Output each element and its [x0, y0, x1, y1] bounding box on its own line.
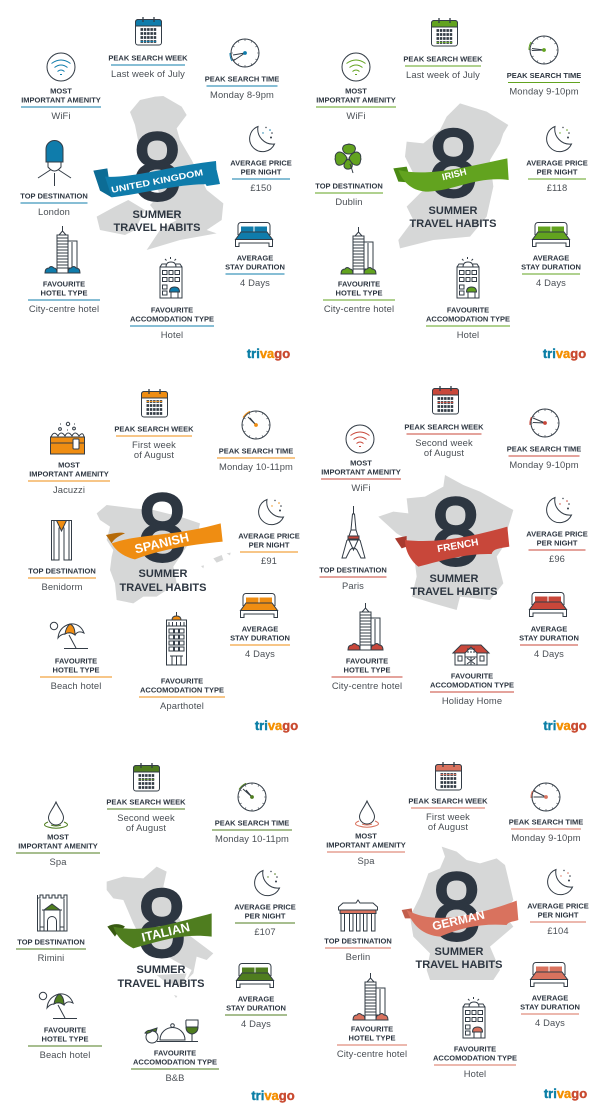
average stay duration: 4 Days	[536, 277, 566, 288]
peak search week: First week	[132, 439, 176, 450]
icon: wifi	[346, 425, 374, 453]
peak search week: Last week of July	[111, 68, 185, 79]
map: United Kingdom	[97, 96, 223, 250]
favourite accomodation type	[430, 672, 514, 706]
favourite hotel type: FAVOURITE	[351, 1025, 393, 1034]
logo: trivago: trivago	[544, 1086, 587, 1101]
most important amenity	[16, 833, 100, 867]
favourite accomodation type: FAVOURITE	[151, 306, 193, 315]
numeral eight: 8	[133, 113, 182, 220]
map, eight and ribbon: United Kingdom	[93, 96, 223, 250]
panel: Irish	[315, 18, 588, 361]
ribbon	[106, 523, 223, 559]
map, eight and ribbon: German	[402, 847, 518, 980]
average price per night: AVERAGE PRICE	[526, 159, 588, 168]
heading	[120, 568, 206, 594]
top destination: Dublin	[335, 196, 363, 207]
most important amenity	[326, 832, 406, 866]
peak search week	[114, 425, 194, 460]
favourite hotel type: City-centre hotel	[332, 680, 402, 691]
peak search time	[212, 819, 292, 844]
favourite accomodation type: Aparthotel	[160, 700, 204, 711]
heading: TRAVEL HABITS	[410, 586, 498, 598]
peak search week	[403, 55, 483, 80]
peak search week	[106, 798, 186, 833]
average stay duration: AVERAGE	[237, 254, 273, 263]
panel: Italian	[16, 763, 296, 1103]
numeral eight: 8	[431, 478, 480, 585]
most important amenity: IMPORTANT AMENITY	[21, 96, 101, 105]
icon: breakfast cloche	[145, 1020, 198, 1043]
favourite hotel type: HOTEL TYPE	[53, 666, 99, 675]
icon: wifi	[342, 53, 370, 81]
peak search time: Monday 9-10pm	[511, 832, 581, 843]
favourite hotel type: Beach hotel	[40, 1049, 90, 1060]
peak search week: PEAK SEARCH WEEK	[106, 798, 186, 807]
average price per night: PER NIGHT	[245, 912, 286, 921]
icon: calendar	[136, 17, 162, 45]
heading: SUMMER	[435, 946, 483, 958]
average price per night: AVERAGE PRICE	[526, 530, 588, 539]
map, eight and ribbon: Spanish	[97, 474, 231, 603]
icon: moon	[250, 126, 274, 152]
average price per night: £118	[547, 182, 567, 193]
average stay duration: 4 Days	[240, 277, 270, 288]
average stay duration	[520, 994, 580, 1028]
heading	[416, 946, 502, 971]
average price per night: PER NIGHT	[537, 168, 578, 177]
average stay duration	[521, 254, 581, 288]
icon: moon	[547, 126, 572, 152]
ribbon title: GERMAN	[431, 908, 486, 933]
panel: United Kingdom	[20, 17, 292, 361]
average stay duration: AVERAGE	[533, 254, 569, 263]
peak search week: Last week of July	[406, 69, 480, 80]
average stay duration: STAY DURATION	[521, 263, 581, 272]
favourite accomodation type: Holiday Home	[442, 695, 502, 706]
average price per night: AVERAGE PRICE	[234, 903, 296, 912]
icon: spa drop	[356, 801, 378, 827]
favourite hotel type: FAVOURITE	[338, 280, 380, 289]
most important amenity: MOST	[58, 461, 80, 470]
most important amenity: WiFi	[51, 110, 71, 121]
icon: hotel	[463, 997, 485, 1038]
peak search time: Monday 9-10pm	[509, 459, 579, 470]
icon: spa drop	[44, 802, 68, 828]
peak search week: PEAK SEARCH WEEK	[108, 54, 188, 63]
peak search week: PEAK SEARCH WEEK	[404, 423, 484, 432]
favourite accomodation type	[426, 306, 510, 340]
favourite accomodation type: FAVOURITE	[451, 672, 493, 681]
top destination: TOP DESTINATION	[324, 937, 392, 946]
top destination: TOP DESTINATION	[319, 566, 387, 575]
peak search week: Second week	[117, 812, 175, 823]
icon: bed	[240, 594, 278, 618]
heading: SUMMER	[429, 205, 477, 217]
peak search week: of August	[134, 449, 174, 460]
ribbon title: IRISH	[441, 166, 468, 182]
favourite accomodation type: FAVOURITE	[447, 306, 489, 315]
average stay duration: 4 Days	[241, 1018, 271, 1029]
average price per night	[234, 903, 296, 937]
favourite hotel type: City-centre hotel	[337, 1048, 407, 1059]
heading	[114, 209, 200, 234]
peak search week: PEAK SEARCH WEEK	[403, 55, 483, 64]
average stay duration: STAY DURATION	[520, 1003, 580, 1012]
ribbon title: ITALIAN	[140, 920, 191, 945]
top destination	[319, 566, 387, 591]
most important amenity: MOST	[355, 832, 377, 841]
peak search time: Monday 8-9pm	[210, 89, 274, 100]
icon: clock	[242, 411, 270, 439]
favourite hotel type: HOTEL TYPE	[42, 1035, 88, 1044]
top destination	[324, 937, 392, 962]
icon: Rimini gate	[38, 895, 67, 931]
favourite accomodation type: ACCOMODATION TYPE	[130, 315, 214, 324]
most important amenity	[316, 87, 396, 121]
most important amenity: IMPORTANT AMENITY	[326, 841, 406, 850]
top destination: TOP DESTINATION	[20, 192, 88, 201]
average price per night: AVERAGE PRICE	[230, 159, 292, 168]
top destination	[28, 567, 96, 592]
top destination: Paris	[342, 580, 364, 591]
icon: clock	[529, 36, 558, 64]
average price per night	[526, 159, 588, 193]
ribbon title: UNITED KINGDOM	[110, 167, 204, 195]
favourite accomodation type: B&B	[165, 1072, 185, 1083]
heading: TRAVEL HABITS	[118, 978, 204, 990]
peak search week	[408, 797, 488, 832]
favourite hotel type: FAVOURITE	[44, 1026, 86, 1035]
most important amenity: IMPORTANT AMENITY	[29, 470, 109, 479]
numeral eight: 8	[137, 870, 186, 977]
average stay duration: 4 Days	[245, 648, 275, 659]
panel: German	[324, 762, 589, 1101]
peak search week: Second week	[415, 437, 473, 448]
average stay duration: AVERAGE	[238, 995, 274, 1004]
ribbon	[107, 913, 212, 948]
top destination: TOP DESTINATION	[315, 182, 383, 191]
icon: city tower	[348, 603, 383, 650]
icon: shamrock	[335, 144, 361, 173]
top destination: London	[38, 206, 70, 217]
average stay duration: STAY DURATION	[519, 634, 579, 643]
favourite accomodation type: ACCOMODATION TYPE	[140, 686, 224, 695]
heading: TRAVEL HABITS	[410, 218, 496, 230]
heading: TRAVEL HABITS	[114, 222, 200, 234]
most important amenity	[28, 461, 110, 495]
peak search time	[217, 447, 295, 472]
favourite hotel type: HOTEL TYPE	[336, 289, 382, 298]
average price per night: PER NIGHT	[538, 911, 579, 920]
most important amenity: WiFi	[351, 482, 371, 493]
icon: city tower	[353, 973, 388, 1020]
most important amenity: MOST	[350, 459, 372, 468]
top destination: Rimini	[38, 952, 64, 963]
most important amenity: Spa	[357, 855, 375, 866]
favourite hotel type: HOTEL TYPE	[41, 289, 87, 298]
average price per night: PER NIGHT	[249, 541, 290, 550]
favourite hotel type: HOTEL TYPE	[349, 1034, 395, 1043]
icon: trousers	[52, 520, 72, 560]
icon: hotel	[457, 257, 479, 298]
logo: trivago: trivago	[255, 718, 298, 733]
favourite hotel type: FAVOURITE	[43, 280, 85, 289]
average stay duration	[230, 625, 290, 659]
peak search time: PEAK SEARCH TIME	[507, 445, 581, 454]
average stay duration	[519, 625, 579, 659]
average stay duration: AVERAGE	[531, 625, 567, 634]
icon: hotel	[160, 257, 182, 298]
icon: aparthotel	[166, 612, 186, 665]
favourite hotel type: City-centre hotel	[324, 303, 394, 314]
favourite hotel type: HOTEL TYPE	[344, 666, 390, 675]
top destination	[315, 182, 383, 207]
favourite accomodation type: FAVOURITE	[454, 1045, 496, 1054]
peak search week	[404, 423, 484, 458]
map: Italy	[107, 867, 213, 998]
peak search time	[507, 71, 581, 96]
numeral eight: 8	[138, 474, 187, 581]
icon: bed	[530, 592, 566, 616]
panel: French	[319, 386, 588, 733]
logo: trivago: trivago	[543, 346, 586, 361]
average price per night: £150	[250, 182, 272, 193]
icon: calendar	[142, 389, 168, 417]
peak search time: PEAK SEARCH TIME	[507, 71, 581, 80]
numeral eight: 8	[432, 853, 481, 960]
peak search time: PEAK SEARCH TIME	[215, 819, 289, 828]
map: Spain	[97, 505, 231, 603]
map, eight and ribbon: Italian	[107, 867, 213, 998]
favourite hotel type	[40, 657, 112, 691]
average price per night: AVERAGE PRICE	[238, 532, 300, 541]
favourite accomodation type: ACCOMODATION TYPE	[133, 1058, 217, 1067]
icon: wifi	[47, 53, 75, 81]
map: France	[378, 475, 513, 610]
icon: moon	[259, 500, 284, 525]
average price per night: £104	[547, 925, 569, 936]
top destination: TOP DESTINATION	[17, 938, 85, 947]
favourite hotel type	[323, 280, 395, 314]
average stay duration: 4 Days	[534, 648, 564, 659]
average price per night	[238, 532, 300, 566]
most important amenity: MOST	[47, 833, 69, 842]
ribbon	[93, 161, 220, 197]
heading	[410, 205, 496, 230]
icon: clock	[230, 39, 259, 67]
most important amenity: Spa	[49, 856, 67, 867]
icon: bed	[236, 964, 274, 988]
favourite hotel type	[337, 1025, 407, 1059]
icon: calendar	[436, 762, 462, 790]
icon: Eiffel tower	[342, 506, 365, 558]
favourite accomodation type	[130, 306, 214, 340]
top destination: Benidorm	[41, 581, 83, 592]
average price per night	[526, 530, 588, 564]
most important amenity: IMPORTANT AMENITY	[321, 468, 401, 477]
icon: bed	[530, 962, 568, 986]
icon: beach umbrella	[50, 622, 88, 648]
peak search week: PEAK SEARCH WEEK	[408, 797, 488, 806]
icon: city tower	[341, 227, 376, 274]
average price per night	[230, 159, 292, 193]
icon: moon	[547, 498, 572, 523]
icon: moon	[548, 870, 572, 895]
peak search week: of August	[126, 822, 166, 833]
icon: moon	[255, 870, 280, 896]
logo: trivago: trivago	[247, 346, 290, 361]
ribbon	[402, 901, 518, 937]
most important amenity: IMPORTANT AMENITY	[18, 842, 98, 851]
heading	[118, 964, 204, 990]
favourite accomodation type	[131, 1049, 219, 1083]
most important amenity: IMPORTANT AMENITY	[316, 96, 396, 105]
average price per night	[527, 902, 589, 936]
icon: royal guard	[38, 140, 71, 186]
heading	[410, 573, 498, 598]
favourite hotel type: City-centre hotel	[29, 303, 99, 314]
icon: clock	[530, 409, 559, 437]
favourite hotel type: FAVOURITE	[346, 657, 388, 666]
most important amenity: MOST	[50, 87, 72, 96]
average price per night: £91	[261, 555, 277, 566]
most important amenity: Jacuzzi	[53, 484, 85, 495]
average price per night: PER NIGHT	[537, 539, 578, 548]
icon: jacuzzi	[50, 422, 84, 454]
icon: holiday home	[453, 645, 489, 665]
favourite accomodation type: Hotel	[457, 329, 479, 340]
peak search time	[205, 75, 279, 100]
favourite accomodation type: FAVOURITE	[161, 677, 203, 686]
favourite hotel type: Beach hotel	[51, 680, 101, 691]
average price per night: £96	[549, 553, 565, 564]
top destination: Berlin	[346, 951, 370, 962]
favourite hotel type: FAVOURITE	[55, 657, 97, 666]
icon: clock	[238, 783, 266, 811]
peak search time	[509, 818, 583, 843]
top destination	[16, 938, 86, 963]
average stay duration: 4 Days	[535, 1017, 565, 1028]
peak search time: PEAK SEARCH TIME	[509, 818, 583, 827]
peak search time	[507, 445, 581, 470]
average stay duration: AVERAGE	[242, 625, 278, 634]
favourite accomodation type	[139, 677, 225, 711]
most important amenity: MOST	[345, 87, 367, 96]
average price per night: PER NIGHT	[241, 168, 282, 177]
favourite accomodation type: ACCOMODATION TYPE	[433, 1054, 517, 1063]
favourite hotel type	[28, 1026, 102, 1060]
average stay duration: STAY DURATION	[226, 1004, 286, 1013]
ribbon title: FRENCH	[436, 537, 479, 555]
average stay duration: AVERAGE	[532, 994, 568, 1003]
most important amenity	[321, 459, 401, 493]
average price per night: AVERAGE PRICE	[527, 902, 589, 911]
peak search time: Monday 9-10pm	[509, 86, 579, 96]
peak search time: Monday 10-11pm	[219, 461, 293, 472]
numeral eight: 8	[429, 110, 478, 217]
favourite accomodation type: ACCOMODATION TYPE	[426, 315, 510, 324]
ribbon	[393, 158, 509, 192]
average price per night: £107	[254, 926, 276, 937]
peak search time: PEAK SEARCH TIME	[219, 447, 293, 456]
heading: SUMMER	[139, 568, 187, 580]
top destination	[20, 192, 88, 217]
peak search week: PEAK SEARCH WEEK	[114, 425, 194, 434]
peak search week: of August	[424, 447, 464, 458]
logo: trivago: trivago	[251, 1088, 295, 1103]
icon: calendar	[432, 386, 458, 414]
panel: Spanish	[28, 389, 300, 733]
favourite hotel type	[28, 280, 100, 314]
top destination: TOP DESTINATION	[28, 567, 96, 576]
heading: SUMMER	[133, 209, 181, 221]
logo: trivago: trivago	[543, 718, 587, 733]
favourite accomodation type: FAVOURITE	[154, 1049, 196, 1058]
ribbon title: SPANISH	[133, 530, 190, 556]
icon: city tower	[45, 226, 80, 273]
map: Ireland	[398, 103, 508, 248]
heading: SUMMER	[137, 964, 185, 976]
ribbon	[395, 527, 509, 567]
peak search week: of August	[428, 821, 468, 832]
favourite accomodation type: ACCOMODATION TYPE	[430, 681, 514, 690]
icon: Brandenburg gate	[338, 900, 378, 931]
icon: bed	[532, 222, 570, 246]
icon: clock	[531, 783, 560, 811]
icon: calendar	[432, 18, 458, 46]
average stay duration: STAY DURATION	[225, 263, 285, 272]
average stay duration	[225, 254, 285, 288]
icon: bed	[236, 222, 272, 246]
average stay duration: STAY DURATION	[230, 634, 290, 643]
icon: beach umbrella	[39, 992, 77, 1018]
most important amenity: WiFi	[346, 110, 366, 121]
heading: TRAVEL HABITS	[416, 959, 502, 971]
favourite accomodation type	[433, 1045, 517, 1079]
peak search time: PEAK SEARCH TIME	[205, 75, 279, 84]
favourite accomodation type: Hotel	[464, 1068, 486, 1079]
heading: SUMMER	[430, 573, 478, 585]
most important amenity	[21, 87, 101, 121]
favourite hotel type	[332, 657, 402, 691]
peak search time: Monday 10-11pm	[215, 833, 289, 844]
icon: calendar	[134, 763, 160, 791]
map: Germany	[410, 847, 513, 980]
map, eight and ribbon: Irish	[393, 103, 509, 248]
heading: TRAVEL HABITS	[120, 582, 206, 594]
peak search week	[108, 54, 188, 79]
average stay duration	[225, 995, 287, 1029]
map, eight and ribbon: French	[378, 475, 513, 610]
peak search week: First week	[426, 811, 470, 822]
favourite accomodation type: Hotel	[161, 329, 183, 340]
